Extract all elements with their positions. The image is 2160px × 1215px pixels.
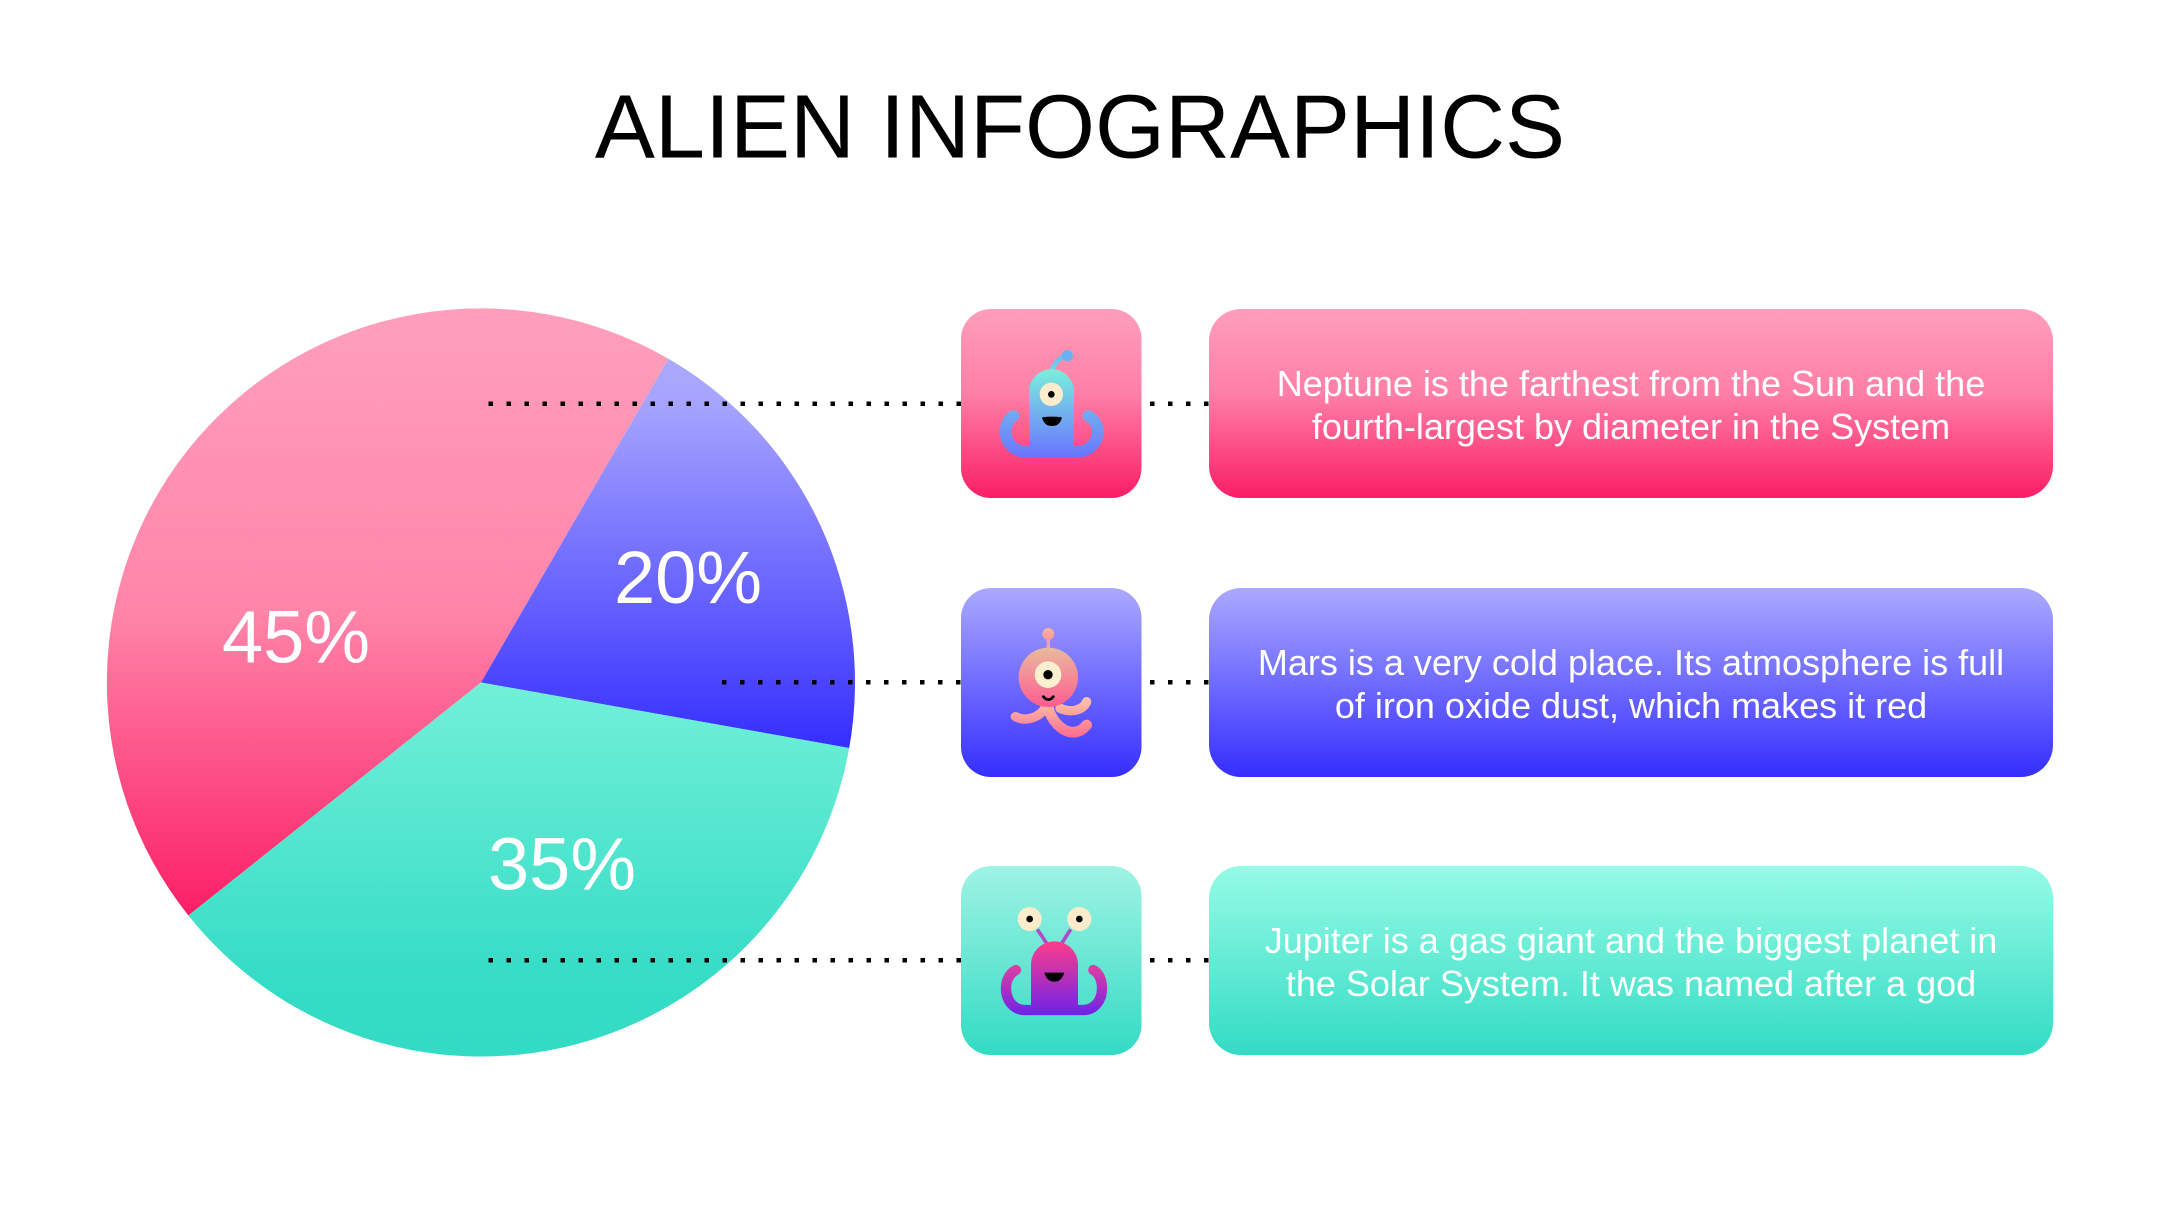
text box: Jupiter: the Solar System. It was named after a god — [1286, 963, 1976, 1004]
pie slice: 35% — [188, 682, 849, 1057]
icon: pink octopus alien — [1015, 628, 1087, 732]
label: 20%: 20% — [614, 536, 762, 619]
text box: Neptune — [1209, 309, 2053, 498]
dotted connector: row 3 — [488, 958, 1209, 963]
label: 35%: 35% — [488, 822, 636, 906]
text box: Mars: Mars is a very cold place. Its atmosphere is full — [1258, 642, 2004, 683]
title: ALIEN INFOGRAPHICS — [595, 78, 1565, 178]
text box: Mars — [1209, 588, 2053, 777]
icon tile: blue alien — [961, 588, 1142, 777]
icon tile: green alien — [961, 866, 1142, 1055]
text box: Jupiter — [1209, 866, 2053, 1055]
dotted connector: row 2 — [722, 680, 1209, 685]
text box: Neptune: Neptune is the farthest from the Sun and the — [1277, 363, 1985, 404]
pie slice: 20% — [481, 359, 855, 748]
text box: Mars: of iron oxide dust, which makes it red — [1335, 685, 1927, 726]
label: 45%: 45% — [222, 596, 370, 678]
icon: blue one-eyed alien — [1006, 350, 1098, 452]
text box: Jupiter: Jupiter is a gas giant and the biggest planet in — [1265, 920, 1997, 961]
dotted connector: row 1 — [488, 401, 1209, 406]
text box: Neptune: fourth-largest by diameter in the System — [1312, 406, 1950, 447]
pie slice: 45% — [107, 308, 668, 915]
icon tile: pink alien — [961, 309, 1142, 498]
icon: magenta stalk-eyed alien — [1006, 907, 1102, 1013]
pie chart — [107, 308, 855, 1057]
